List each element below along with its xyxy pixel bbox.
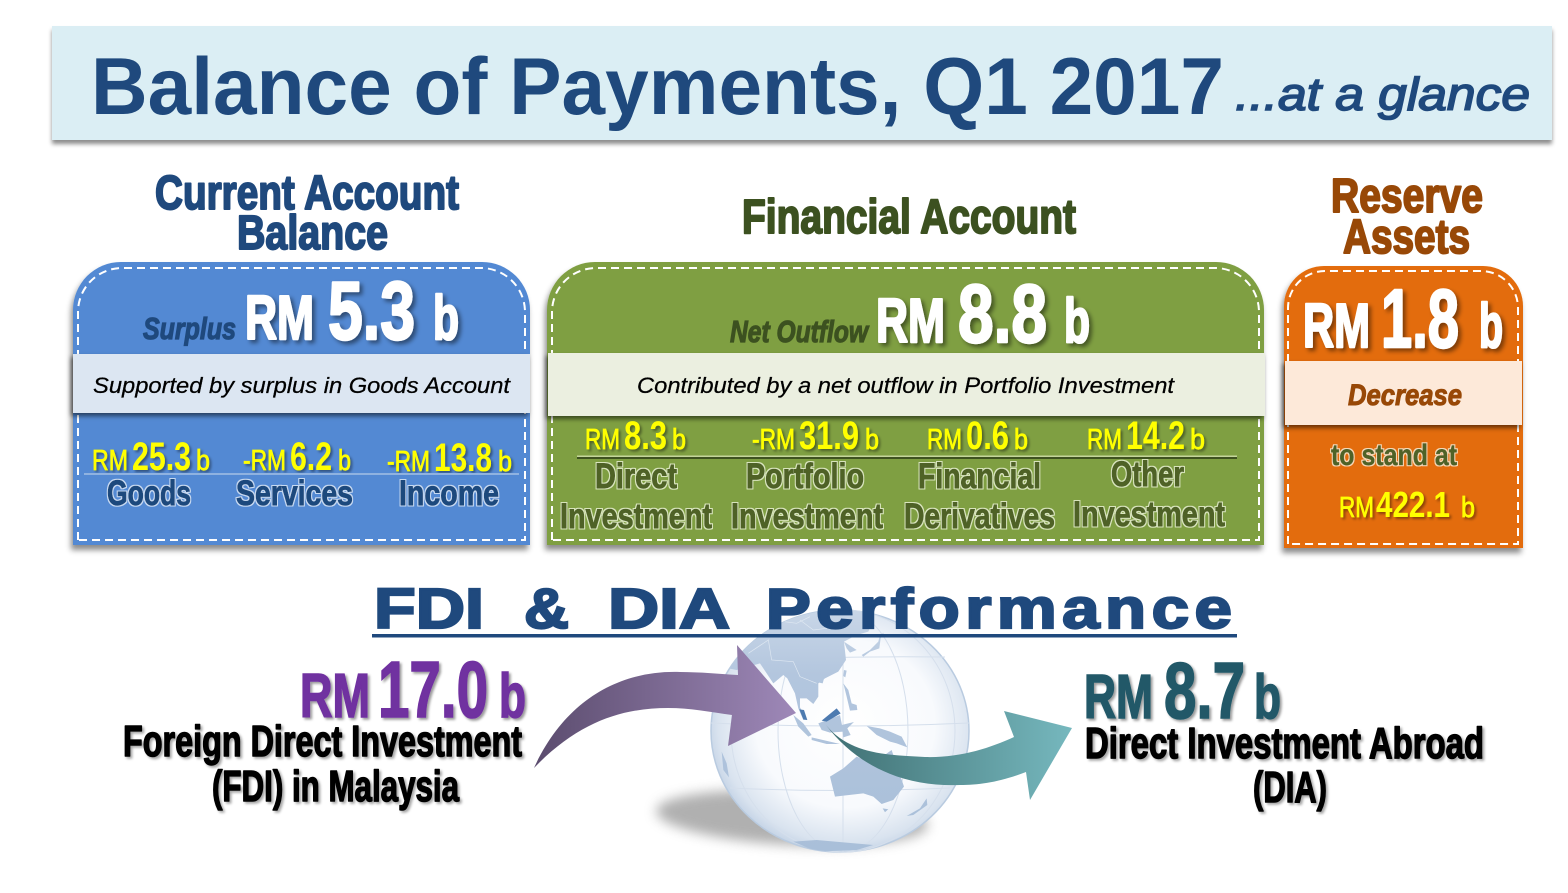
goods value: 25.3 xyxy=(132,435,191,479)
FDI label: (FDI) in Malaysia xyxy=(212,762,459,811)
portfolio investment value xyxy=(752,414,879,458)
headline: net outflow RM 8.8 b: Net Outflow xyxy=(730,314,869,349)
services value: b xyxy=(338,445,351,477)
portfolio investment value: 31.9 xyxy=(799,414,859,458)
goods value: b xyxy=(196,445,210,477)
income value xyxy=(387,436,512,480)
band: current account note: Supported by surplus in Goods Account xyxy=(93,373,511,398)
headline: surplus RM 5.3 b: RM xyxy=(245,284,314,353)
panel: financial account xyxy=(547,262,1265,545)
other investment value: 14.2 xyxy=(1126,414,1185,458)
FDI value: b xyxy=(499,662,526,731)
financial derivatives value: RM xyxy=(927,424,962,456)
headline: surplus RM 5.3 b: 5.3 xyxy=(328,264,415,357)
portfolio investment value: -RM xyxy=(752,424,795,456)
headline: net outflow RM 8.8 b: RM xyxy=(876,287,945,356)
headline: surplus RM 5.3 b xyxy=(143,264,459,357)
headline: RM 1.8 b: 1.8 xyxy=(1381,272,1459,365)
financial account labels: Investment xyxy=(1073,495,1225,534)
financial derivatives value: b xyxy=(1014,424,1028,456)
main title: Balance of Payments, Q1 2017 xyxy=(91,42,1224,132)
band: decrease: Decrease xyxy=(1348,379,1462,412)
section heading: FDI and DIA performance: Performance xyxy=(766,578,1232,641)
FDI value: 17.0 xyxy=(378,645,488,734)
other investment value: RM xyxy=(1087,424,1122,456)
DIA value: b xyxy=(1254,663,1281,732)
headline: RM 1.8 b: b xyxy=(1479,292,1503,361)
globe landmasses xyxy=(720,603,927,852)
direct investment value: RM xyxy=(585,424,620,456)
portfolio investment value: b xyxy=(865,424,879,456)
headline: net outflow RM 8.8 b xyxy=(730,267,1090,360)
financial derivatives value xyxy=(927,414,1028,458)
reserve level value: 422.1 xyxy=(1376,484,1450,525)
headline: net outflow RM 8.8 b: 8.8 xyxy=(958,267,1047,360)
financial account labels: Portfolio xyxy=(746,457,864,496)
current account labels: Income xyxy=(399,474,499,513)
heading: reserve assets: Reserve xyxy=(1331,170,1483,223)
heading: current account balance: Current Account xyxy=(155,167,459,220)
goods value xyxy=(92,435,210,479)
arrow: FDI inflow xyxy=(534,645,796,768)
DIA label xyxy=(1085,719,1484,812)
direct investment value: 8.3 xyxy=(624,414,667,458)
DIA label: (DIA) xyxy=(1253,763,1327,812)
services value: -RM xyxy=(243,445,286,477)
section heading: FDI and DIA performance: FDI xyxy=(374,577,484,641)
financial account labels xyxy=(560,455,1225,536)
services value xyxy=(243,435,351,479)
current account labels: Goods xyxy=(107,474,191,513)
DIA value xyxy=(1084,646,1281,735)
headline: RM 1.8 b: RM xyxy=(1303,292,1370,361)
direct investment value: b xyxy=(672,424,686,456)
reserve level value: b xyxy=(1461,492,1475,524)
heading: reserve assets: Assets xyxy=(1343,211,1470,264)
band: decrease xyxy=(1285,361,1522,425)
headline: surplus RM 5.3 b: Surplus xyxy=(143,311,236,346)
financial account labels: Investment xyxy=(731,497,883,536)
financial account labels: Financial xyxy=(918,457,1041,496)
FDI value xyxy=(300,645,526,734)
reserve level value xyxy=(1339,484,1475,525)
band: financial account note: Contributed by a net outflow in Portfolio Investment xyxy=(637,373,1175,398)
title banner xyxy=(52,26,1552,140)
panel: reserve assets xyxy=(1284,266,1523,548)
section heading: FDI and DIA performance: & xyxy=(524,577,569,641)
current account labels xyxy=(107,474,499,513)
financial account labels: Other xyxy=(1111,455,1184,494)
FDI value: RM xyxy=(300,662,370,731)
band: current account note xyxy=(73,354,530,413)
headline: net outflow RM 8.8 b: b xyxy=(1064,287,1090,356)
goods value: RM xyxy=(92,445,128,477)
income value: 13.8 xyxy=(434,436,492,480)
services value: 6.2 xyxy=(290,435,332,479)
globe illustration xyxy=(655,603,969,852)
heading: reserve assets xyxy=(1331,170,1483,264)
income value: -RM xyxy=(387,446,430,478)
financial account labels: Investment xyxy=(560,497,712,536)
headline: surplus RM 5.3 b: b xyxy=(433,284,459,353)
headline: RM 1.8 b xyxy=(1303,272,1503,365)
section heading: FDI and DIA performance: DIA xyxy=(608,577,730,641)
financial account labels: Derivatives xyxy=(904,497,1055,536)
current account labels: Services xyxy=(236,474,353,513)
arrow: DIA outflow xyxy=(826,711,1072,800)
section heading: FDI and DIA performance xyxy=(372,577,1237,641)
income value: b xyxy=(498,446,512,478)
heading: current account balance xyxy=(155,167,459,260)
direct investment value xyxy=(585,414,686,458)
heading: financial account: Financial Account xyxy=(742,191,1076,244)
other investment value xyxy=(1087,414,1205,458)
heading: current account balance: Balance xyxy=(237,207,388,260)
band: financial account note xyxy=(548,353,1265,416)
financial derivatives value: 0.6 xyxy=(966,414,1009,458)
FDI label xyxy=(123,717,522,811)
other investment value: b xyxy=(1190,424,1205,456)
Malaysia highlight xyxy=(799,708,841,722)
title suffix: ...at a glance xyxy=(1235,68,1530,120)
DIA value: RM xyxy=(1084,663,1153,732)
financial account labels: Direct xyxy=(595,457,677,496)
FDI label: Foreign Direct Investment xyxy=(123,717,522,766)
DIA value: 8.7 xyxy=(1164,646,1245,735)
country borders xyxy=(748,616,828,684)
reserve level value: RM xyxy=(1339,492,1374,524)
to stand at label: to stand at xyxy=(1331,439,1457,472)
panel: current account xyxy=(73,262,530,545)
